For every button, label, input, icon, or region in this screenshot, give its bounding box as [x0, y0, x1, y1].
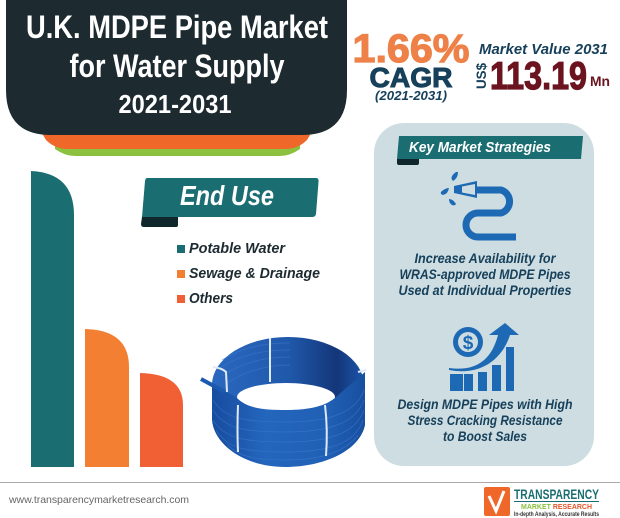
- CAGR stat: (2021-2031): [375, 88, 447, 103]
- strategies heading: [397, 136, 583, 165]
- logo: [484, 486, 600, 518]
- title banner: [6, 0, 347, 156]
- strategy 1 text: [398, 250, 572, 298]
- title text: U.K. MDPE Pipe Market: [26, 9, 328, 45]
- CAGR stat: 1.66%: [352, 27, 470, 71]
- market value stat: 113.19: [490, 55, 587, 98]
- panel: key market strategies: [374, 123, 594, 466]
- end use heading: [141, 178, 319, 227]
- logo: MARKET RESEARCH: [521, 502, 592, 511]
- pipe coil image: [201, 337, 366, 467]
- bar chart: end use: [31, 171, 183, 467]
- title text: [26, 9, 328, 119]
- icon: dollar growth chart: $: [463, 333, 474, 354]
- icon: hose with water drops: [441, 172, 516, 237]
- CAGR stat: CAGR: [370, 62, 452, 93]
- strategy 1 text: Increase Availability for: [414, 250, 557, 266]
- strategy 2 text: Stress Cracking Resistance: [408, 412, 563, 428]
- legend: Sewage & Drainage: [189, 265, 320, 282]
- logo: In-depth Analysis, Accurate Results: [514, 512, 600, 518]
- strategy 2 text: [398, 396, 572, 444]
- icon: dollar growth chart: [449, 323, 519, 391]
- end use heading: End Use: [180, 180, 274, 211]
- CAGR stat: [352, 27, 470, 103]
- strategy 2 text: Design MDPE Pipes with High: [398, 396, 572, 412]
- strategies heading: Key Market Strategies: [409, 139, 551, 156]
- market value stat: [473, 41, 610, 98]
- legend: Others: [189, 290, 233, 307]
- strategy 1 text: WRAS-approved MDPE Pipes: [400, 266, 571, 282]
- title text: for Water Supply: [70, 48, 285, 84]
- strategy 2 text: to Boost Sales: [443, 428, 527, 444]
- legend: Potable Water: [189, 240, 286, 257]
- market value stat: Market Value 2031: [479, 41, 608, 58]
- market value stat: US$: [473, 63, 489, 89]
- footer rule: [0, 482, 620, 483]
- market value stat: Mn: [590, 73, 610, 89]
- title text: 2021-2031: [118, 89, 232, 119]
- website url: www.transparencymarketresearch.com: [8, 494, 189, 506]
- legend: [177, 240, 320, 307]
- strategy 1 text: Used at Individual Properties: [398, 282, 572, 298]
